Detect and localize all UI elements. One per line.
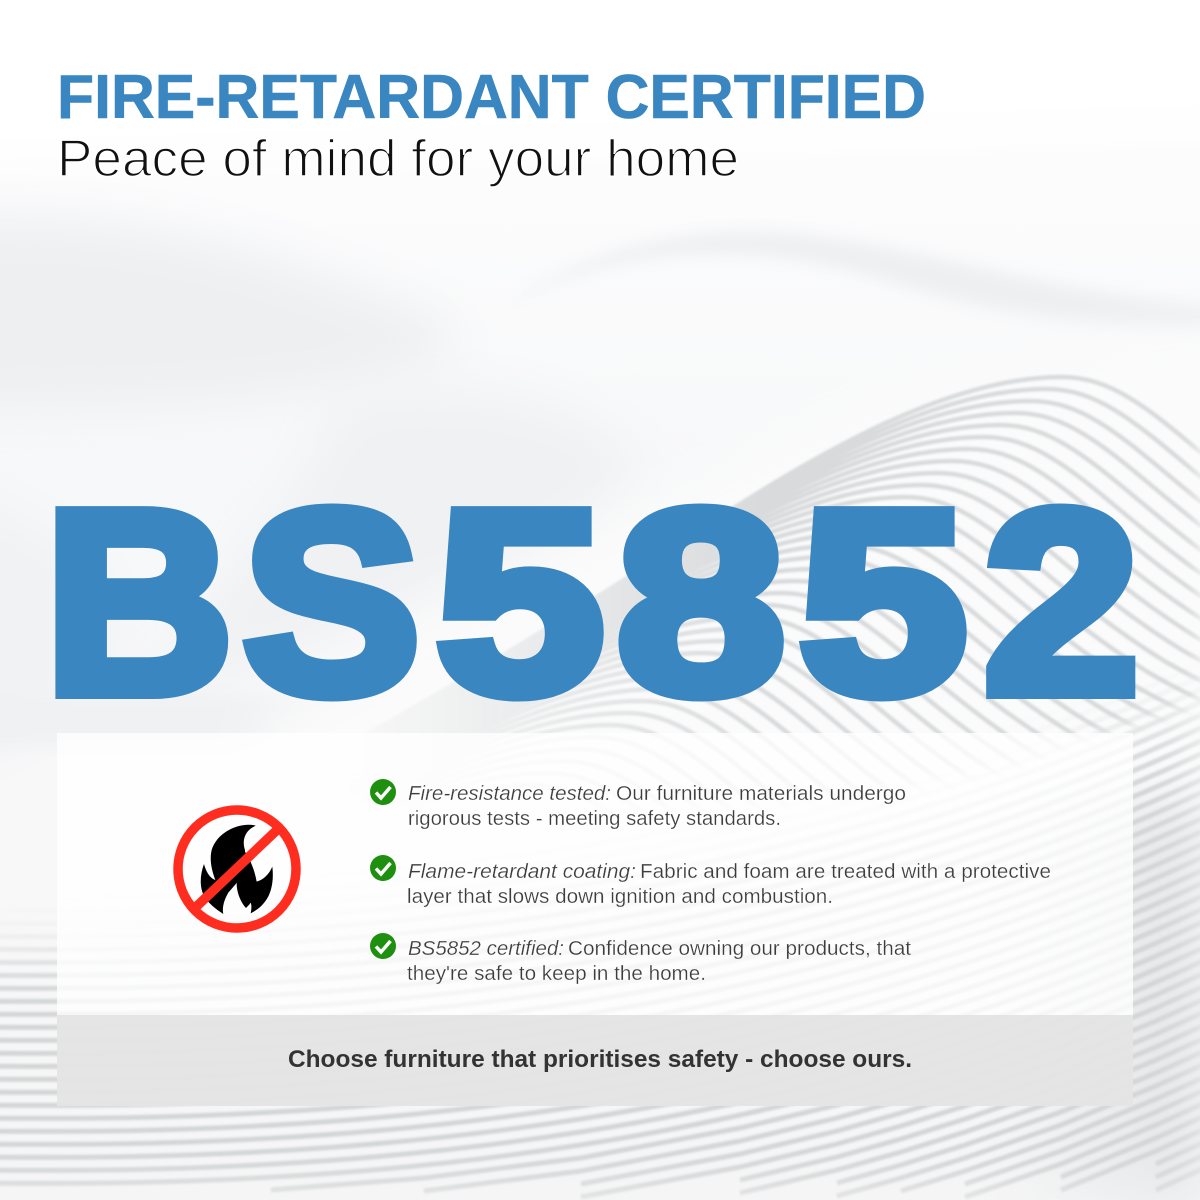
- icon: green check: [370, 933, 396, 959]
- icon: green check: [370, 855, 396, 881]
- bullet: flame-retardant coating: layer that slows down ignition and combustion.: [407, 886, 833, 908]
- background: lower ripple lines: [0, 696, 1200, 1199]
- bullet: BS5852 certified: [370, 933, 911, 985]
- title: FIRE-RETARDANT CERTIFIED: [57, 63, 926, 132]
- bullet: fire-resistance tested: rigorous tests - meeting safety standards.: [408, 808, 781, 830]
- bullet: fire-resistance tested: [370, 779, 906, 830]
- subtitle: Peace of mind for your home: [57, 130, 739, 188]
- headline: BS5852: 5: [799, 458, 967, 748]
- headline: BS5852: 8: [617, 458, 785, 748]
- bullet: BS5852 certified: they're safe to keep in the home.: [407, 963, 706, 985]
- headline: BS5852: S: [243, 458, 420, 748]
- bullet: BS5852 certified: Confidence owning our products, that: [568, 938, 911, 960]
- background: ridge shape: [260, 330, 1200, 800]
- bullet: fire-resistance tested: Our furniture materials undergo: [616, 783, 906, 805]
- headline: BS5852: 5: [436, 458, 604, 748]
- headline: BS5852: 2: [984, 458, 1139, 748]
- bullet: BS5852 certified: BS5852 certified:: [408, 938, 564, 960]
- bullet: flame-retardant coating: [370, 855, 1051, 908]
- icon: green check: [370, 779, 396, 805]
- bullet: fire-resistance tested: Fire-resistance tested:: [408, 783, 611, 805]
- footer band: [57, 1015, 1133, 1106]
- headline: BS5852: [45, 458, 1139, 748]
- footer text: Choose furniture that prioritises safety - choose ours.: [288, 1046, 912, 1073]
- icon: no fire: [178, 810, 296, 928]
- headline: BS5852: B: [45, 458, 233, 748]
- bullet: flame-retardant coating: Fabric and foam are treated with a protective: [640, 861, 1051, 883]
- bullet: flame-retardant coating: Flame-retardant coating:: [408, 861, 636, 883]
- panel: certification details: [57, 733, 1133, 1015]
- background: rippled dune lines: [423, 374, 1200, 733]
